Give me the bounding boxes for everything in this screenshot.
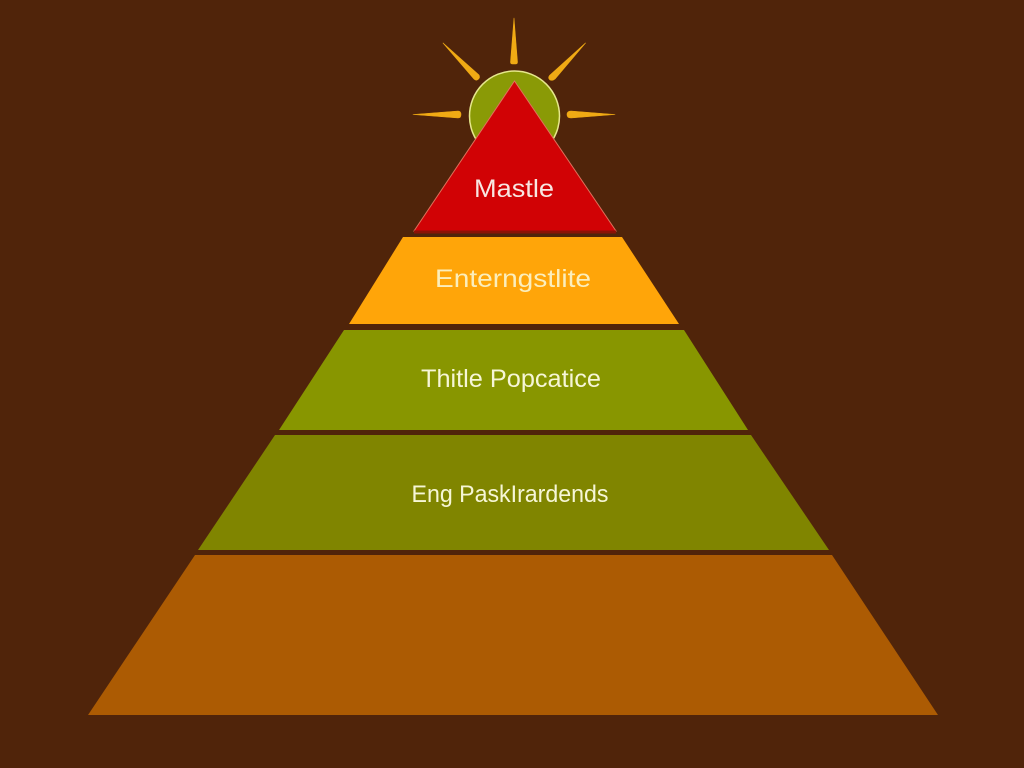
label: Enterngstlite: Enterngstlite <box>435 265 591 293</box>
label: Eng Paskrardends: Eng PaskIrardends <box>412 481 608 508</box>
label: Thitle Popcatice: Thitle Popcatice <box>421 365 601 393</box>
pyramid tier 5: base <box>88 555 938 715</box>
pyramid tier 1: Mastle <box>414 81 616 234</box>
icon: sun <box>413 18 615 161</box>
label: Mastle: Mastle <box>474 175 554 203</box>
sun disc <box>470 71 560 161</box>
pyramid tier 3: Thitle Popcatice <box>279 330 748 430</box>
pyramid tier 2: Enterngstlite <box>349 237 679 324</box>
pyramid tier 4: Eng Paskrardends <box>198 435 829 550</box>
sun rays <box>413 18 615 118</box>
